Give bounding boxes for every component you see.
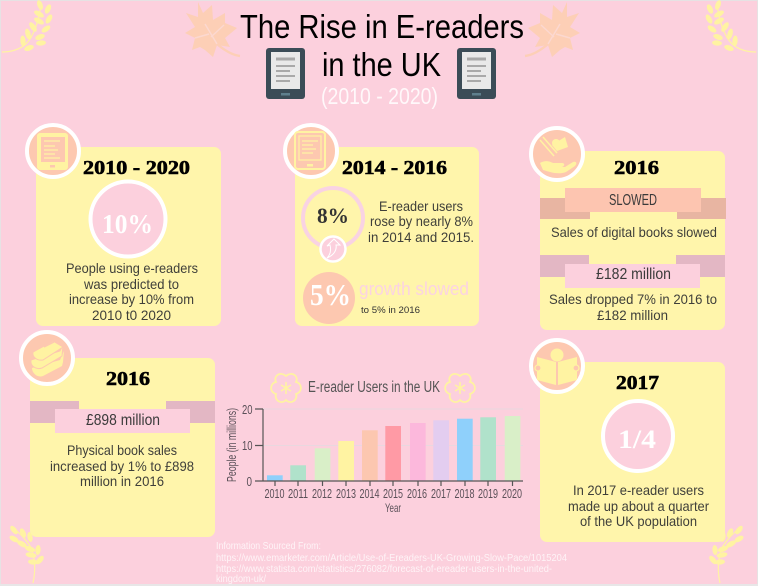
x axis labels: 2019	[478, 487, 498, 501]
title: in the UK	[322, 46, 441, 83]
icon: e-reader badge	[285, 125, 337, 177]
text block: made up about a quarter	[568, 498, 709, 514]
x axis labels: 2010	[264, 487, 285, 501]
text block	[549, 291, 717, 323]
panel: 2016 digital sales	[540, 151, 726, 330]
panel: 2016 physical sales	[30, 358, 215, 537]
x axis labels: 2017	[431, 487, 451, 501]
icon: e-reader left	[266, 48, 305, 99]
icon: books badge	[21, 332, 73, 384]
stat circle: 10%: 10%	[102, 209, 153, 239]
chart: e-reader users in the UK	[225, 374, 523, 515]
sources	[216, 540, 567, 585]
icon: flower left	[271, 374, 301, 402]
ribbon: slowed	[540, 188, 726, 219]
icon: e-reader right	[457, 48, 496, 99]
x axis labels: 2011	[288, 487, 308, 501]
title: The Rise in E-readers	[240, 8, 524, 45]
chart title: E-reader Users in the UK	[308, 379, 440, 396]
sources: Information Sourced From:	[216, 540, 321, 552]
x axis labels: 2018	[454, 487, 475, 501]
decoration: wheat bottom left	[8, 524, 45, 583]
decoration: wheat top right	[704, 0, 756, 52]
text block	[66, 260, 198, 323]
title: (2010 - 2020)	[321, 83, 438, 109]
text block: in 2014 and 2015.	[368, 229, 474, 245]
y axis labels: 10	[242, 439, 253, 453]
stat ring: 8%: 8%	[317, 203, 349, 228]
ribbon: £898 million	[30, 401, 215, 433]
icon: tablet badge	[27, 125, 79, 177]
y axis labels: 0	[246, 475, 252, 489]
heading: 2016	[614, 157, 659, 179]
x axis labels: 2012	[312, 487, 332, 501]
text block: People using e-readers	[66, 260, 198, 276]
x axis labels: 2013	[336, 487, 356, 501]
text block: rose by nearly 8%	[370, 213, 473, 229]
decoration: wheat bottom right	[708, 524, 745, 583]
stat circle: 10%	[90, 182, 166, 256]
sources: https://www.emarketer.com/Article/Use-of-Ereaders-UK-Growing-Slow-Pace/1015204	[216, 552, 567, 564]
ribbon: slowed: SLOWED	[609, 192, 657, 209]
sources: kingdom-uk/	[216, 573, 266, 585]
text block: Sales of digital books slowed	[551, 224, 717, 240]
text block: increased by 1% to £898	[50, 458, 194, 474]
x axis labels: 2016	[407, 487, 427, 501]
x axis labels: 2015	[383, 487, 403, 501]
icon: person reading badge	[531, 340, 583, 392]
decoration: maple leaf left	[185, 2, 240, 57]
stat ring: 8%	[303, 188, 363, 248]
decoration: wheat top left	[2, 0, 54, 52]
text block: million in 2016	[80, 473, 164, 489]
callout: growth slowed: growth slowed	[359, 279, 469, 299]
text block: £182 million	[597, 307, 668, 323]
icon: flower right	[445, 374, 475, 402]
text block: Physical book sales	[67, 442, 177, 458]
ribbon: £182 million	[540, 255, 725, 288]
callout: growth slowed: to 5% in 2016	[361, 305, 420, 316]
axes	[255, 409, 523, 486]
text block: was predicted to	[83, 276, 179, 292]
panel: 2010 - 2020	[36, 147, 221, 326]
stat circle: 1/4	[603, 401, 673, 471]
y axis labels	[225, 403, 253, 489]
stat circle: 1/4: 1/4	[618, 425, 656, 454]
x axis title: Year	[385, 501, 401, 515]
y axis labels: People (in millions)	[225, 408, 239, 482]
icon: hand and book badge	[531, 128, 583, 180]
heading: 2010 - 2020	[83, 157, 190, 179]
text block: increase by 10% from	[69, 291, 194, 307]
text block	[568, 482, 709, 529]
y axis labels: 20	[242, 403, 253, 417]
text block	[50, 442, 194, 489]
text block: E-reader users	[379, 198, 463, 214]
text block: of the UK population	[580, 513, 697, 529]
callout: growth slowed	[359, 279, 469, 316]
panel: 2017	[540, 362, 725, 542]
x axis labels: 2020	[502, 487, 522, 501]
text block	[368, 198, 474, 245]
x axis labels	[264, 487, 522, 501]
ribbon: £182 million: £182 million	[596, 266, 671, 283]
title	[240, 8, 524, 109]
text block: In 2017 e-reader users	[573, 482, 704, 498]
heading: 2014 - 2016	[342, 157, 447, 179]
bars	[267, 416, 520, 481]
heading: 2016	[106, 368, 150, 390]
ribbon: £898 million: £898 million	[86, 412, 160, 429]
stat circle: 5%	[303, 272, 355, 324]
stat circle: 5%: 5%	[310, 277, 351, 312]
text block: 2010 t0 2020	[92, 307, 171, 323]
heading: 2017	[616, 372, 659, 394]
decoration: maple leaf right	[525, 2, 580, 57]
x axis labels: 2014	[360, 487, 380, 501]
icon: up arrow badge	[320, 236, 346, 262]
text block: Sales dropped 7% in 2016 to	[549, 291, 717, 307]
panel: 2014 - 2016	[295, 147, 479, 326]
sources: https://www.statista.com/statistics/276082/forecast-of-ereader-users-in-the-united-	[216, 563, 552, 575]
